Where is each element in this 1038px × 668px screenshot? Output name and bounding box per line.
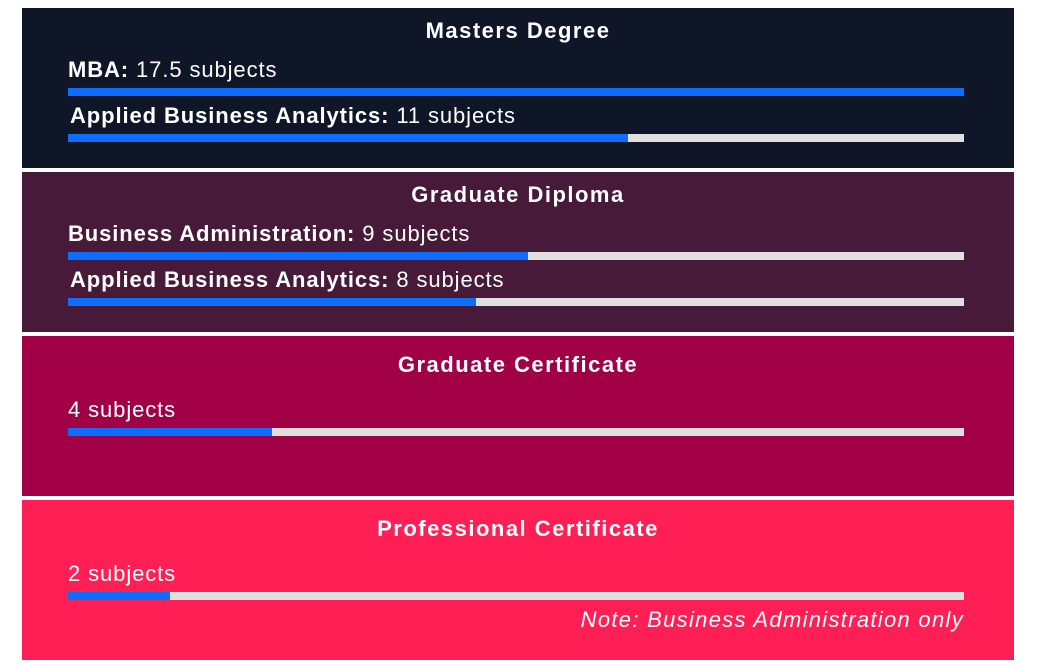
label: 4 subjects: 4 subjects <box>68 397 176 422</box>
bar: professional certificate <box>68 592 964 600</box>
label: business administration diploma: Business Administration: 9 subjects <box>68 221 470 246</box>
label: MBA: MBA: 17.5 subjects <box>68 57 277 82</box>
bar: MBA <box>68 88 964 96</box>
bar: applied business analytics masters <box>68 134 964 142</box>
label: applied business analytics diploma: Applied Business Analytics: 8 subjects <box>70 267 504 292</box>
heading: graduate diploma: Graduate Diploma <box>411 182 625 207</box>
heading: masters degree: Masters Degree <box>426 18 610 43</box>
panel: professional certificate <box>22 500 1014 660</box>
bar: business administration diploma <box>68 252 964 260</box>
label: 2 subjects: 2 subjects <box>68 561 176 586</box>
bar: graduate certificate <box>68 428 964 436</box>
label: applied business analytics masters: Applied Business Analytics: 11 subjects <box>70 103 516 128</box>
panel: masters degree <box>22 8 1014 168</box>
note: Note: Business Administration only <box>581 607 964 632</box>
heading: professional certificate: Professional Certificate <box>377 516 659 541</box>
panel: graduate certificate <box>22 336 1014 496</box>
panel: graduate diploma <box>22 172 1014 332</box>
heading: graduate certificate: Graduate Certificate <box>398 352 638 377</box>
bar: applied business analytics diploma <box>68 298 964 306</box>
